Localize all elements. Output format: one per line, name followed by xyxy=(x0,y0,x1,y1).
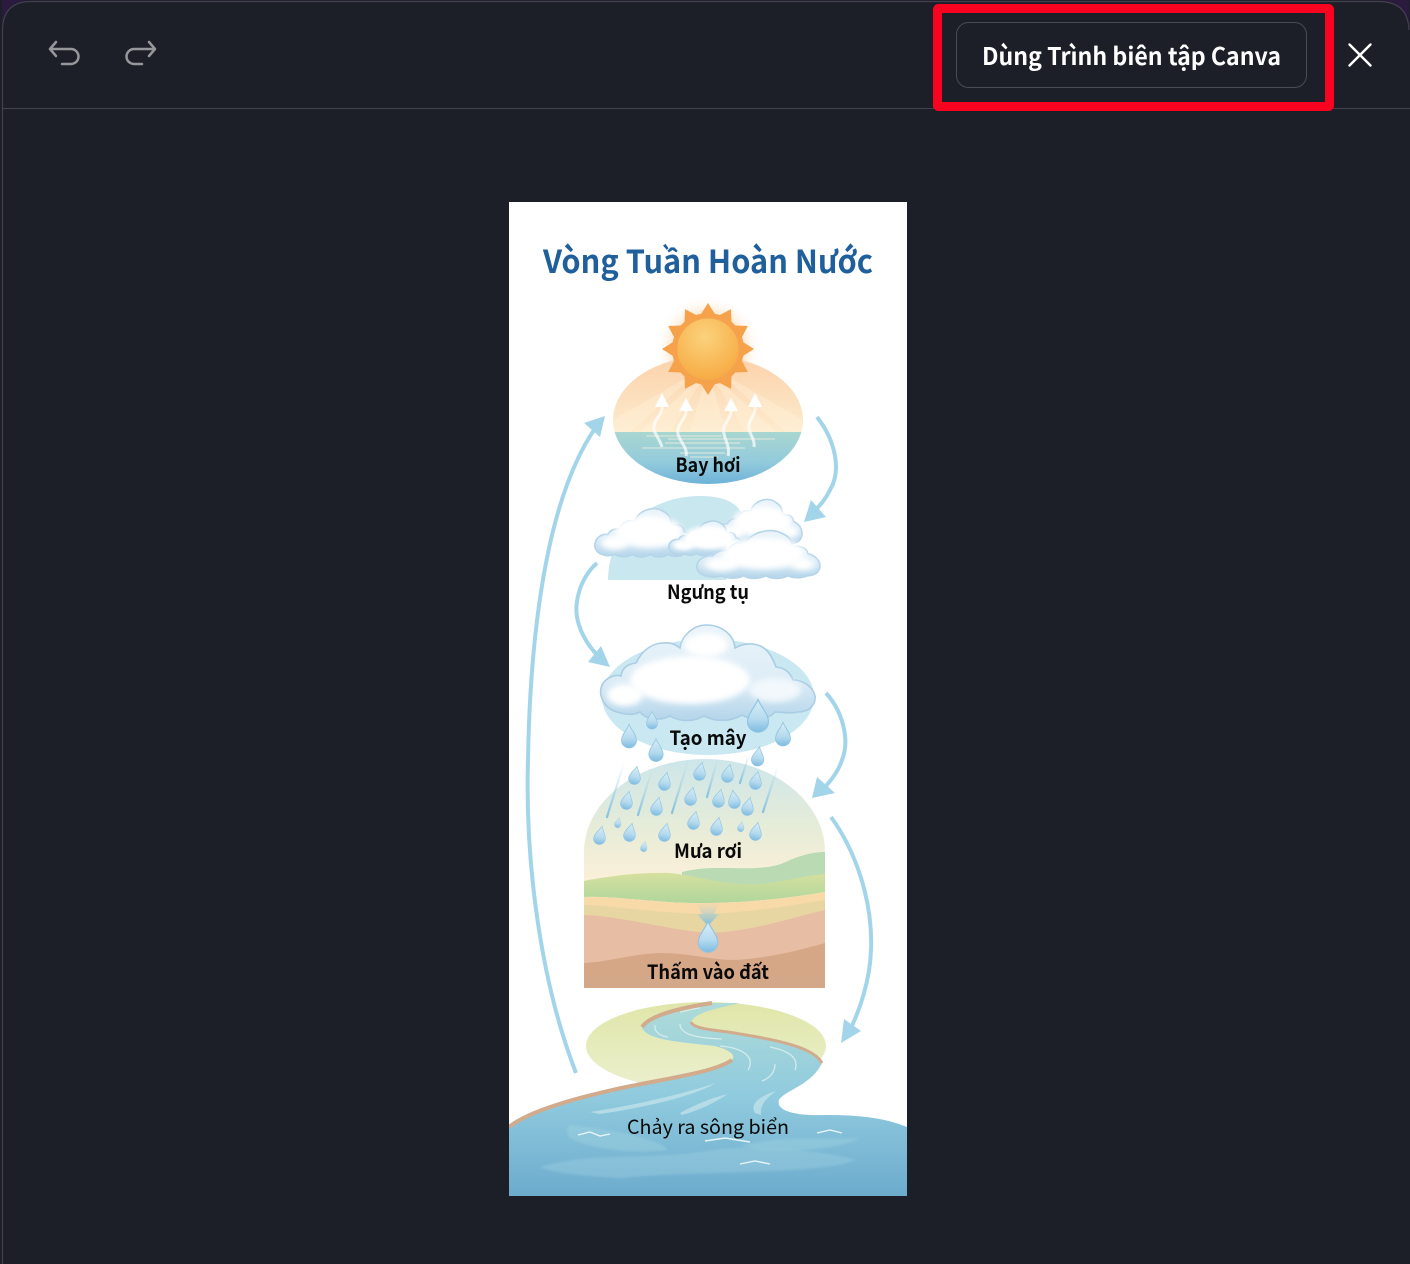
cycle arrow: ground to river xyxy=(831,817,871,1043)
cycle arrow: evaporation to condensation xyxy=(804,417,836,522)
icon: redo xyxy=(126,42,155,64)
cycle arrow: sea back to evaporation xyxy=(528,416,605,1073)
seeping water drop xyxy=(697,903,719,952)
stage: condensation xyxy=(595,496,820,605)
scene ellipse xyxy=(613,360,803,484)
cloud front xyxy=(697,531,820,578)
stage: river to sea xyxy=(509,1000,907,1196)
layered landscape xyxy=(584,759,825,990)
red highlight frame xyxy=(938,8,1330,106)
stage: rain and infiltration xyxy=(584,746,825,990)
backdrop xyxy=(602,639,814,755)
label: Bay hơi xyxy=(676,449,740,478)
backdrop xyxy=(608,496,745,580)
raindrops xyxy=(593,746,766,852)
cycle arrow: condensation to clouds xyxy=(576,563,610,667)
button: use Canva editor: Dùng Trình biên tập Canva xyxy=(982,37,1281,72)
stage: cloud formation xyxy=(601,625,815,761)
sun xyxy=(662,303,754,395)
label: infiltration: Thấm vào đất xyxy=(647,956,769,985)
label: Tạo mây xyxy=(670,722,746,751)
infographic panel xyxy=(509,202,907,1196)
button: use Canva editor xyxy=(956,22,1306,88)
land ellipse xyxy=(586,1002,826,1090)
storm cloud xyxy=(601,625,815,720)
cloud drops xyxy=(622,699,790,761)
rain streaks xyxy=(607,755,778,817)
icon: undo xyxy=(50,42,78,64)
cycle arrow: clouds to rain xyxy=(812,693,845,798)
cloud back right xyxy=(716,499,802,546)
label: rain: Mưa rơi xyxy=(674,835,742,864)
label: Ngưng tụ xyxy=(667,576,749,605)
river and sea xyxy=(509,1000,907,1196)
right river bank xyxy=(691,1022,822,1063)
sun glow xyxy=(654,295,762,403)
rising vapour arrows xyxy=(654,404,755,456)
icon: close xyxy=(1350,44,1370,66)
cloud left xyxy=(595,509,694,557)
title: Vòng Tuần Hoàn Nước xyxy=(542,237,873,283)
label: Chảy ra sông biển xyxy=(627,1111,789,1140)
cloud middle xyxy=(669,521,743,555)
left river bank xyxy=(509,1003,732,1127)
stage: evaporation xyxy=(610,295,806,486)
